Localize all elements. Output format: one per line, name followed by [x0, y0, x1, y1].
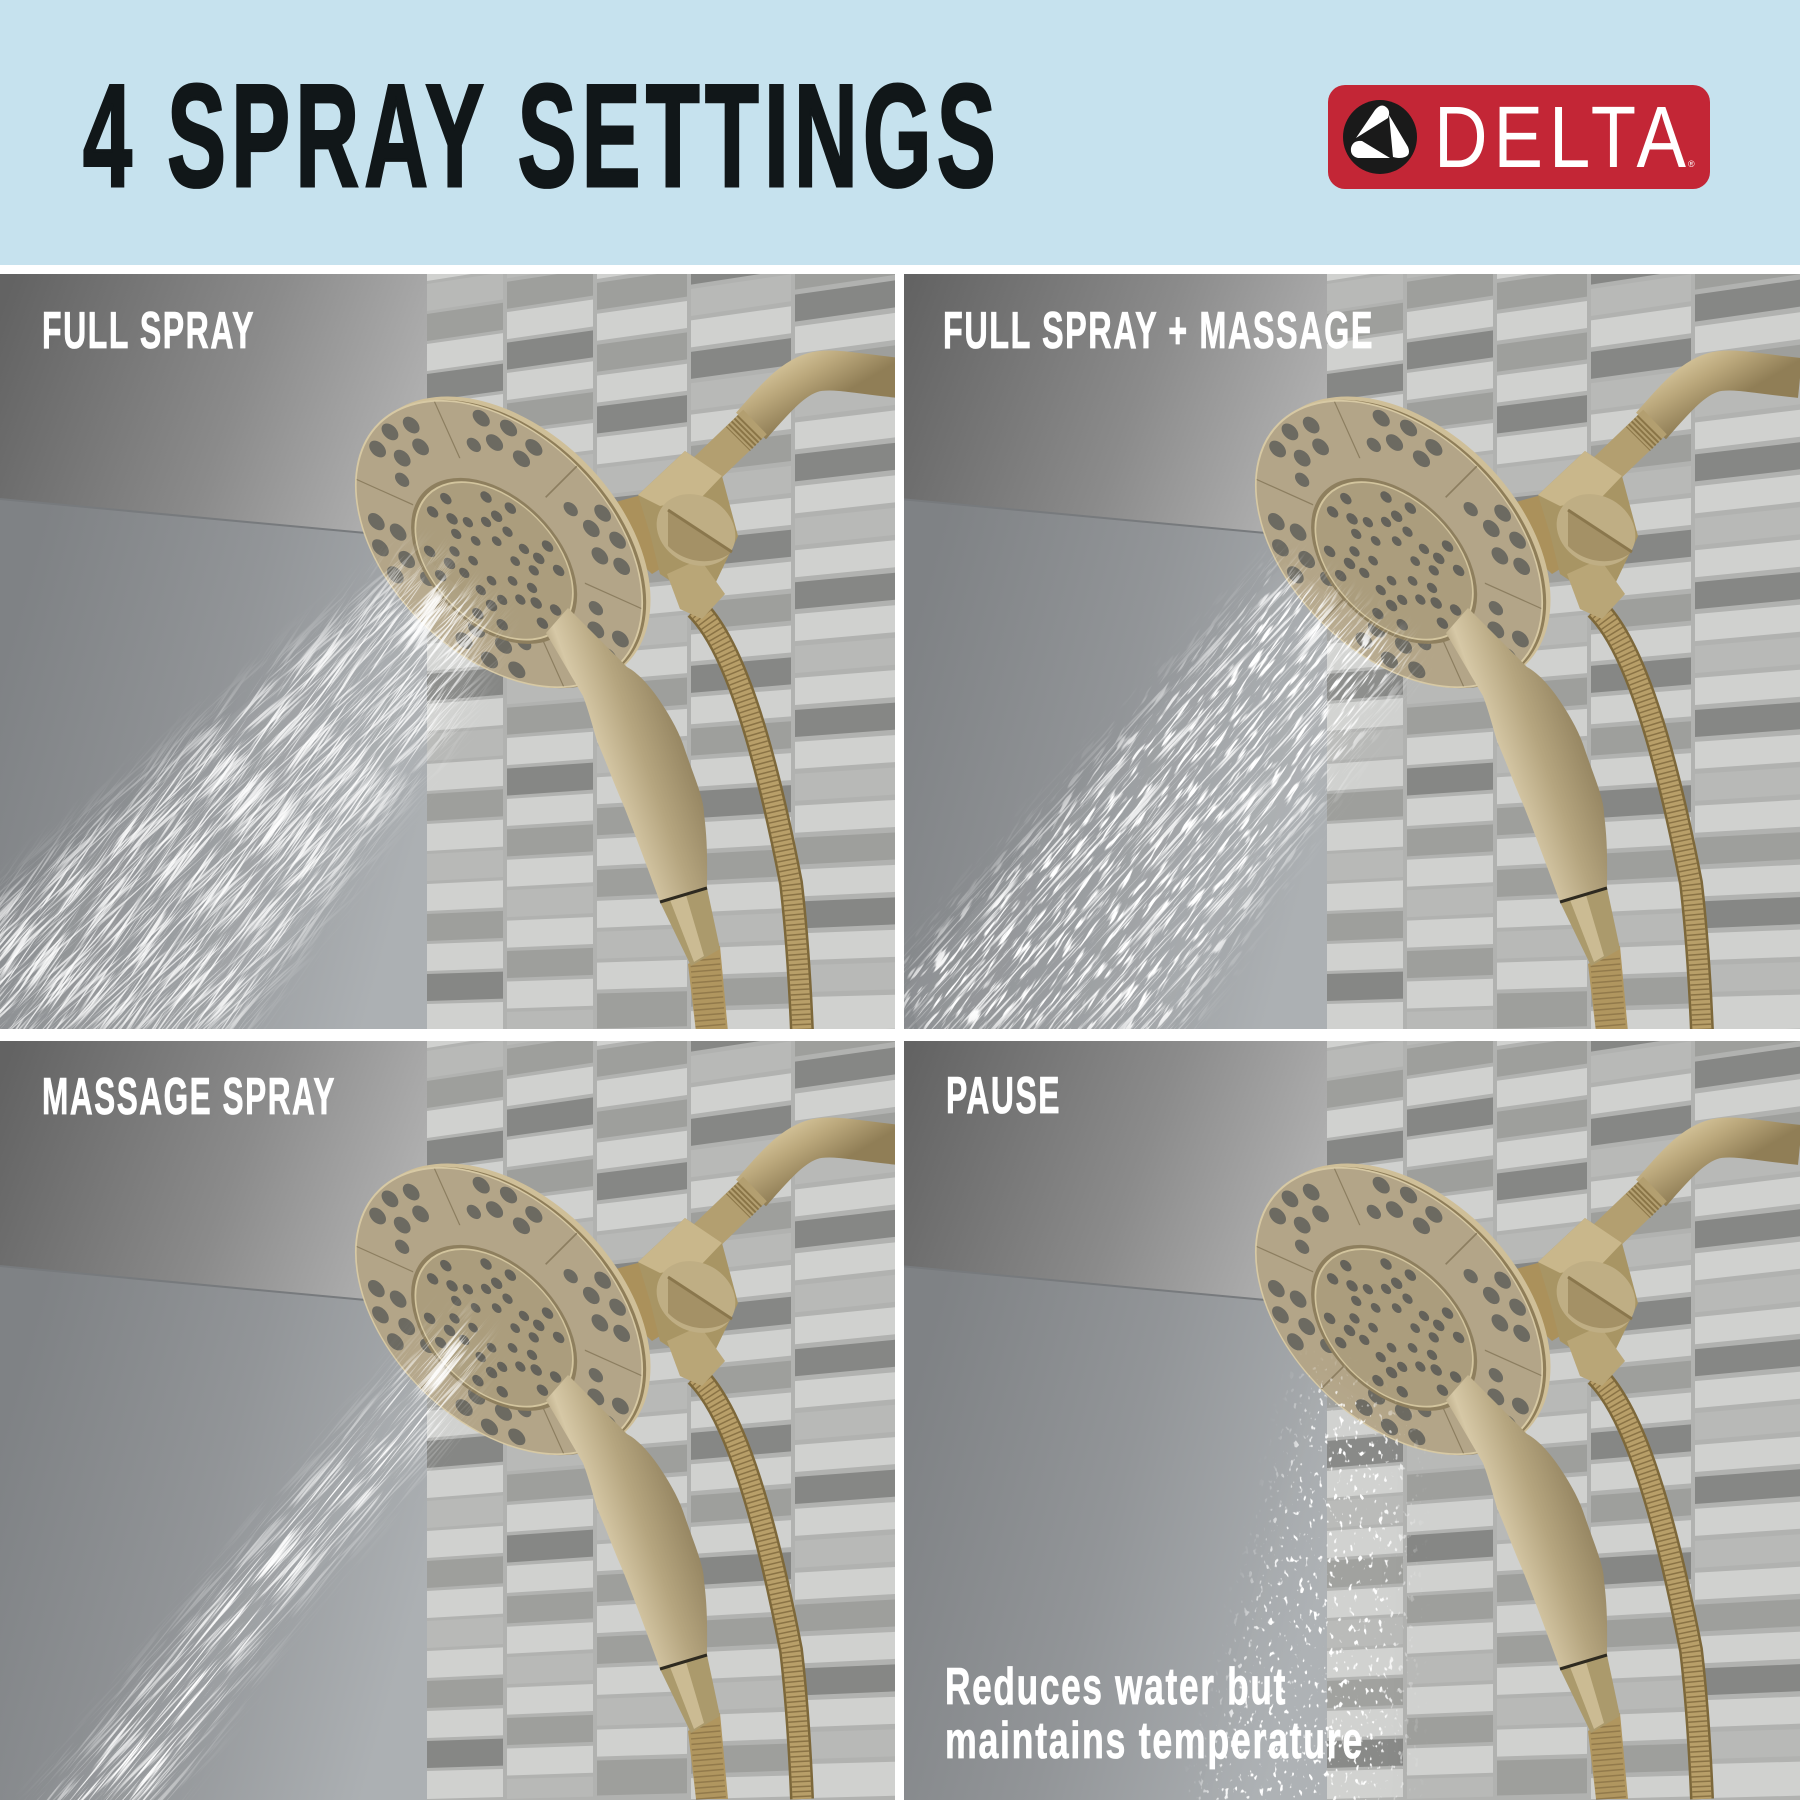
- caption second line: maintains temperature: [945, 1712, 1364, 1770]
- wall and tiles: [0, 173, 900, 1041]
- label: PAUSE: [946, 1067, 1061, 1125]
- title: 4 SPRAY SETTINGS: [83, 54, 1001, 217]
- logo: Delta: [1328, 85, 1710, 189]
- header band: [0, 0, 1800, 265]
- label: FULL SPRAY: [42, 302, 255, 360]
- logo: Delta: DELTA: [1434, 89, 1692, 186]
- logo: Delta: ®: [1688, 159, 1695, 169]
- panel: full spray: [0, 274, 895, 1029]
- panel: full spray plus massage: [904, 274, 1800, 1029]
- shower head: [301, 1107, 900, 1799]
- water droplets: [1198, 1365, 1405, 1800]
- label: MASSAGE SPRAY: [42, 1068, 336, 1126]
- panel: pause: [904, 1041, 1800, 1800]
- label: FULL SPRAY + MASSAGE: [943, 302, 1374, 360]
- wall and tiles: [0, 940, 900, 1800]
- panel: massage spray: [0, 1041, 895, 1800]
- water spray: [34, 1314, 482, 1800]
- wall, tiles and head: [900, 173, 1800, 1041]
- caption: Reduces water but: [945, 1658, 1287, 1716]
- water spray: [0, 551, 494, 1029]
- shower head: [301, 340, 900, 1032]
- water spray: [906, 562, 1411, 1029]
- wall, tiles and head: [900, 940, 1800, 1800]
